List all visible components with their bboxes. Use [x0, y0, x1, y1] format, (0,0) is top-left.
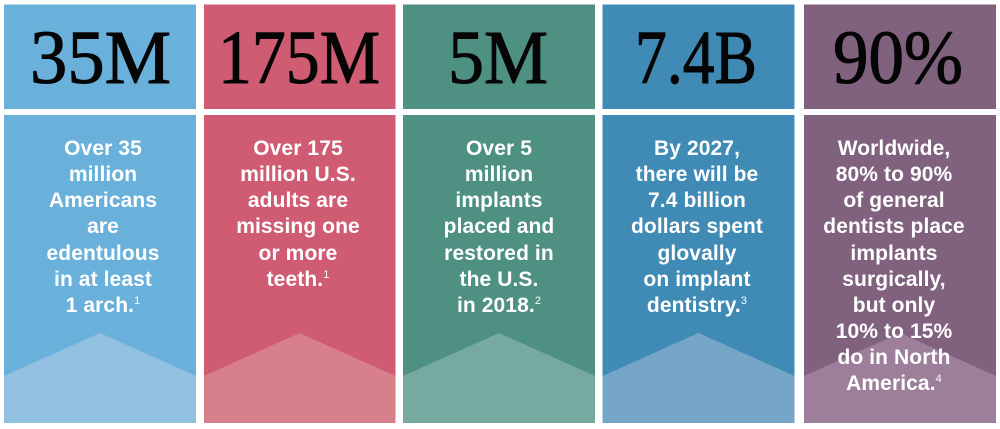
body box: [804, 115, 996, 423]
description text: the U.S.: [460, 268, 538, 291]
description text: [631, 137, 763, 317]
header box: [204, 4, 396, 109]
description text: Americans: [49, 189, 157, 212]
description text: of general: [843, 189, 945, 212]
chevron: [602, 333, 794, 423]
description text: on implant: [643, 268, 751, 291]
description text: Over 35: [64, 137, 142, 160]
body box: [602, 115, 794, 423]
header box: [4, 4, 196, 109]
description text: in 2018.: [457, 294, 535, 317]
description text: implants: [455, 189, 543, 212]
chevron: [204, 333, 396, 423]
description text: Over 175: [253, 137, 343, 160]
panel: 5M: [403, 4, 595, 423]
body box: [4, 115, 196, 423]
description text: 7.4 billion: [648, 189, 746, 212]
description text: million: [465, 163, 533, 186]
panel: 35M: [4, 4, 196, 423]
description text: do in North: [837, 346, 951, 369]
description text: million U.S.: [240, 163, 356, 186]
description text: dentists place: [823, 215, 965, 238]
chevron: [403, 333, 595, 423]
description text: 10% to 15%: [836, 320, 952, 343]
chevron: [4, 333, 196, 423]
description text: missing one: [236, 215, 360, 238]
description text: teeth.: [267, 268, 323, 291]
description text: America.: [846, 372, 936, 395]
description text: [444, 137, 554, 317]
description text: adults are: [248, 189, 348, 212]
description text: dentistry.: [647, 294, 741, 317]
description text: 2: [535, 295, 541, 307]
description text: implants: [850, 242, 938, 265]
description text: 1: [323, 269, 329, 281]
description text: there will be: [636, 163, 758, 186]
number: 35M: 35M: [30, 16, 171, 100]
body box: [403, 115, 595, 423]
description text: [236, 137, 360, 291]
number: 5M: 5M: [448, 16, 548, 100]
panel: 90%: [804, 4, 996, 423]
description text: 4: [936, 373, 942, 385]
description text: restored in: [444, 242, 554, 265]
description text: but only: [853, 294, 935, 317]
description text: 1: [134, 295, 140, 307]
description text: in at least: [54, 268, 152, 291]
description text: surgically,: [842, 268, 946, 291]
description text: Over 5: [466, 137, 532, 160]
number: 90%: 90%: [833, 16, 963, 100]
description text: [823, 137, 965, 395]
description text: million: [69, 163, 137, 186]
description text: placed and: [444, 215, 554, 238]
description text: 1 arch.: [66, 294, 134, 317]
description text: 80% to 90%: [836, 163, 952, 186]
body box: [204, 115, 396, 423]
number: 7.4B: 7.4B: [635, 16, 757, 100]
chevron: [804, 333, 996, 423]
description text: 3: [741, 295, 747, 307]
description text: or more: [259, 242, 337, 265]
description text: glovally: [658, 242, 737, 265]
header box: [804, 4, 996, 109]
description text: edentulous: [46, 242, 160, 265]
description text: dollars spent: [631, 215, 763, 238]
description text: [46, 137, 160, 317]
panel: 175M: [204, 4, 396, 423]
number: 175M: 175M: [218, 16, 380, 100]
header box: [602, 4, 794, 109]
panel: 7.4B: [602, 4, 794, 423]
description text: are: [87, 215, 119, 238]
description text: Worldwide,: [838, 137, 950, 160]
header box: [403, 4, 595, 109]
description text: By 2027,: [654, 137, 740, 160]
